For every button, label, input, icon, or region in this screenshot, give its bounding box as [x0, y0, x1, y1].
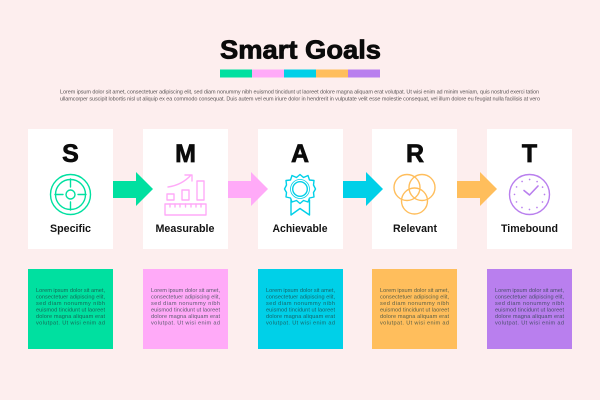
icon: overlapping circles — [394, 174, 435, 214]
text block: sed diam nonummy nibh — [36, 301, 105, 307]
letter T: T — [522, 140, 537, 168]
title: Smart Goals — [220, 34, 381, 64]
text block: Lorem ipsum dolor sit amet, — [36, 288, 105, 294]
text block: euismod tincidunt ut laoreet — [36, 308, 105, 314]
text block — [266, 288, 335, 326]
panel: timebound — [487, 129, 572, 249]
text block: sed diam nonummy nibh — [380, 301, 449, 307]
colour bar — [220, 70, 380, 78]
intro paragraph — [60, 90, 540, 102]
panel: specific description — [28, 269, 113, 349]
icon: growth chart and ruler — [165, 175, 206, 215]
text block: euismod tincidunt ut laoreet — [495, 308, 564, 314]
icon: rosette — [284, 174, 316, 215]
panel: measurable description — [143, 269, 228, 349]
label: Measurable — [156, 223, 214, 235]
panel: achievable — [258, 129, 343, 249]
text block — [36, 288, 105, 326]
text block: dolore magna aliquam erat — [266, 314, 335, 320]
panel: achievable description — [258, 269, 343, 349]
icon: clock — [510, 174, 550, 214]
arrow: orange — [457, 172, 497, 206]
text block: dolore magna aliquam erat — [36, 314, 105, 320]
text block: consectetuer adipiscing elit, — [495, 294, 564, 300]
panel: timebound description — [487, 269, 572, 349]
text block: sed diam nonummy nibh — [266, 301, 335, 307]
arrow: green — [113, 172, 153, 206]
text block: volutpat. Ut wisi enim ad — [495, 320, 564, 326]
label: Specific — [50, 223, 91, 235]
text block: Lorem ipsum dolor sit amet, — [266, 288, 335, 294]
intro paragraph: Lorem ipsum dolor sit amet, consectetuer adipiscing elit, sed diam nonummy nibh euismod tincidunt ut laoreet dolore magna aliquam erat volutpat. Ut wisi enim ad minim veniam, quis nostrud exerci tation — [60, 90, 539, 96]
text block: Lorem ipsum dolor sit amet, — [151, 288, 220, 294]
panel: measurable — [143, 129, 228, 249]
arrow: cyan — [343, 172, 383, 206]
label: Achievable — [272, 223, 328, 235]
text block: dolore magna aliquam erat — [380, 314, 449, 320]
text block: consectetuer adipiscing elit, — [151, 294, 220, 300]
text block: dolore magna aliquam erat — [495, 314, 564, 320]
letter M: M — [175, 140, 196, 168]
text block: sed diam nonummy nibh — [151, 301, 220, 307]
text block: volutpat. Ut wisi enim ad — [151, 320, 220, 326]
intro paragraph: ullamcorper suscipit lobortis nisl ut aliquip ex ea commodo consequat. Duis autem vel eum iriure dolor in hendrerit in vulputate velit esse molestie consequat, vel illum dolore eu feugiat nulla facilisis at vero — [60, 96, 540, 102]
text block — [380, 288, 449, 326]
icon: target — [50, 174, 90, 214]
letter S: S — [62, 140, 79, 168]
arrow: pink — [228, 172, 268, 206]
text block: consectetuer adipiscing elit, — [266, 294, 335, 300]
label: Relevant — [393, 223, 437, 235]
text block: volutpat. Ut wisi enim ad — [380, 320, 449, 326]
text block: Lorem ipsum dolor sit amet, — [380, 288, 449, 294]
letter R: R — [406, 140, 424, 168]
text block — [495, 288, 564, 326]
panel: relevant — [372, 129, 457, 249]
text block: euismod tincidunt ut laoreet — [380, 308, 449, 314]
text block: consectetuer adipiscing elit, — [380, 294, 449, 300]
text block: dolore magna aliquam erat — [151, 314, 220, 320]
panel: specific — [28, 129, 113, 249]
panel: relevant description — [372, 269, 457, 349]
text block: volutpat. Ut wisi enim ad — [36, 320, 105, 326]
label: Timebound — [501, 223, 558, 235]
text block: Lorem ipsum dolor sit amet, — [495, 288, 564, 294]
text block: volutpat. Ut wisi enim ad — [266, 320, 335, 326]
text block: euismod tincidunt ut laoreet — [266, 308, 335, 314]
text block: consectetuer adipiscing elit, — [36, 294, 105, 300]
letter A: A — [291, 140, 309, 168]
text block: euismod tincidunt ut laoreet — [151, 308, 220, 314]
text block: sed diam nonummy nibh — [495, 301, 564, 307]
text block — [151, 288, 220, 326]
